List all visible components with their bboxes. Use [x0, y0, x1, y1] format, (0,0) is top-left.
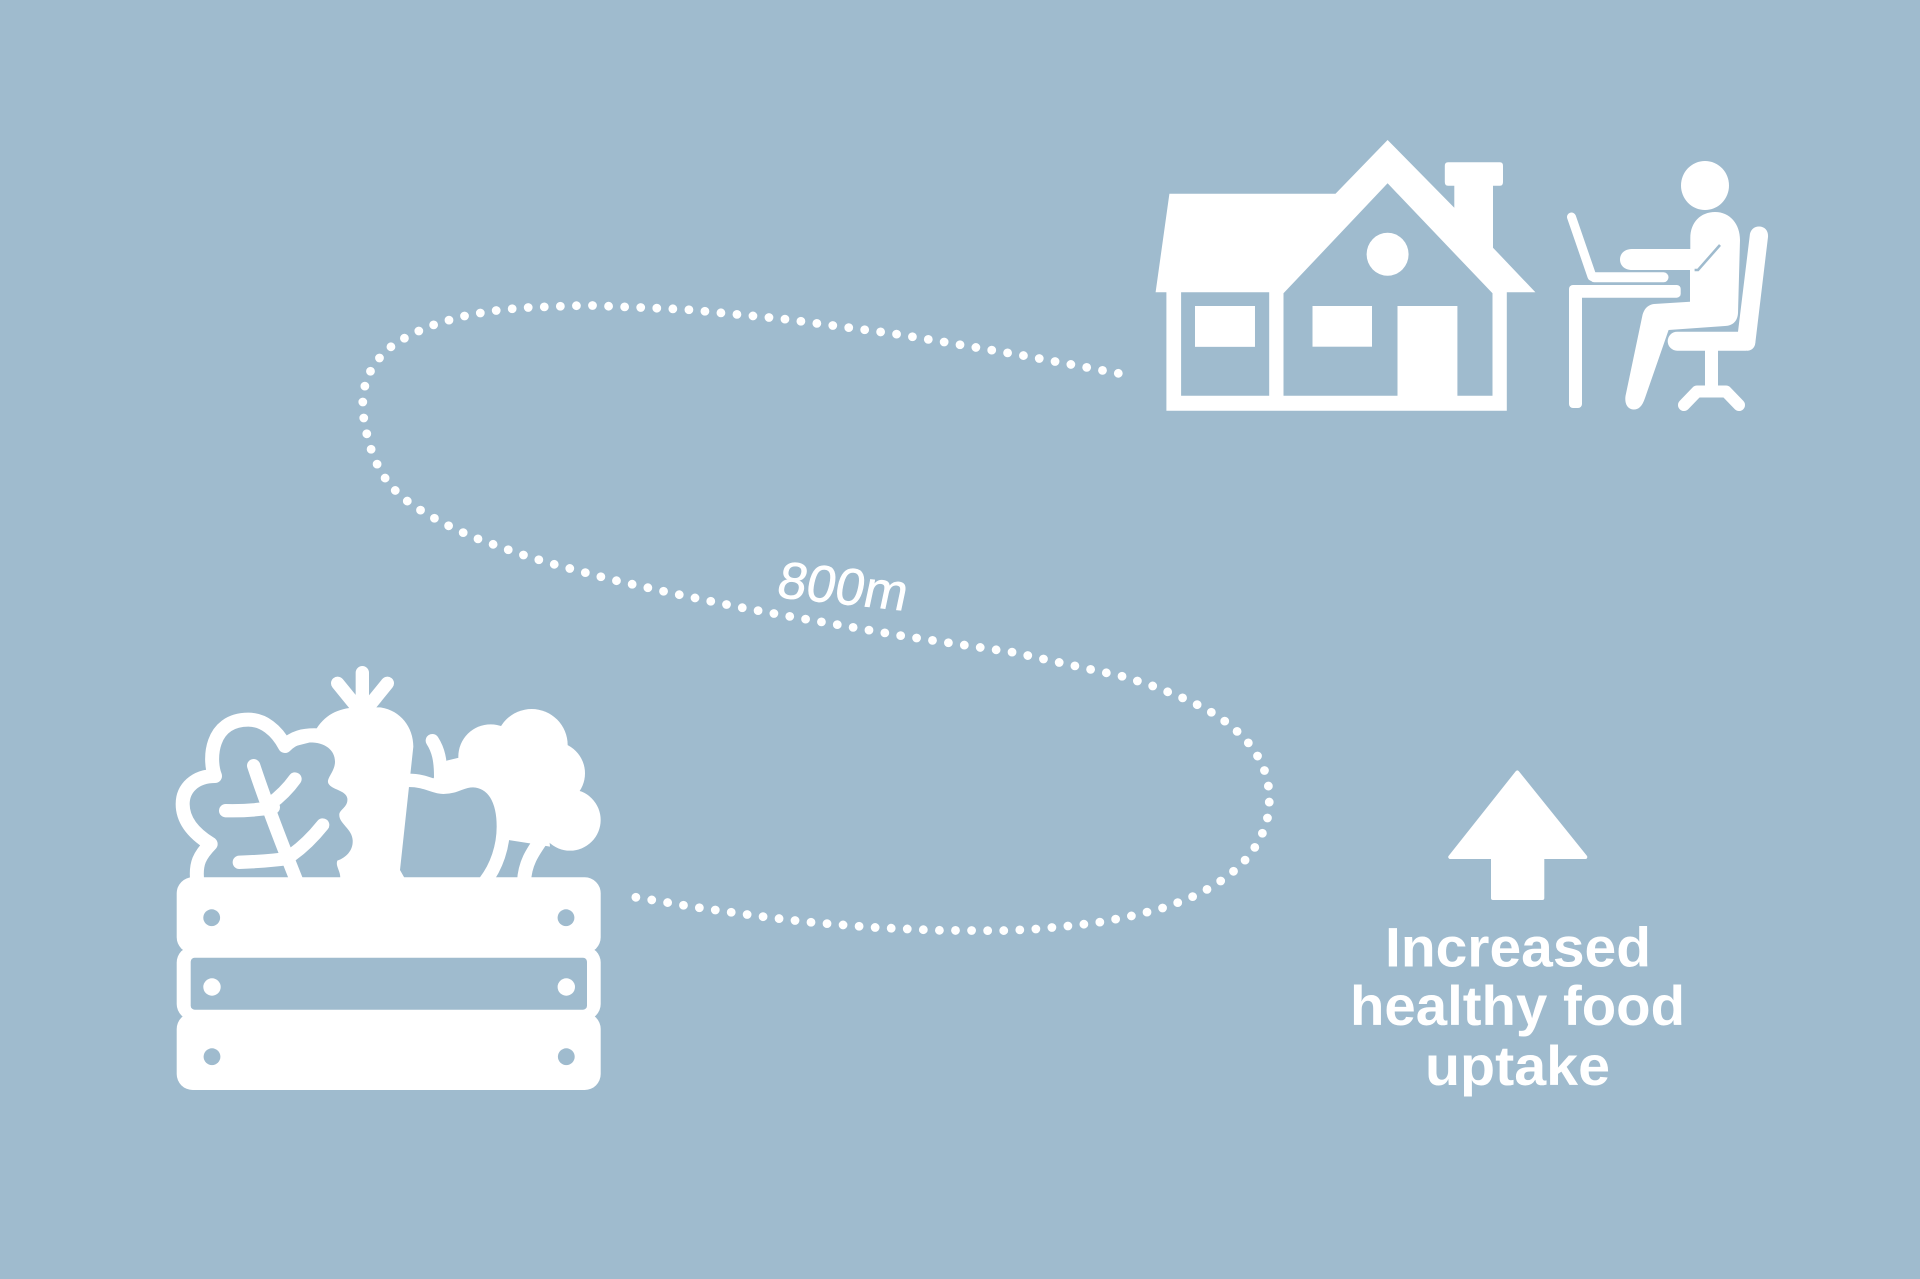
crate middle plank: [177, 946, 601, 1020]
person body and leg: [1620, 212, 1740, 410]
lettuce veins: [226, 766, 323, 882]
crate top plank: [177, 877, 601, 953]
person head: [1681, 161, 1729, 210]
house: round attic window: [1367, 233, 1409, 276]
person arm crease: [1695, 245, 1720, 270]
caption line 2: healthy food: [1350, 974, 1685, 1037]
desk leg: [1569, 287, 1582, 408]
crate screw holes top: [203, 909, 574, 926]
carrot body: [293, 707, 413, 880]
distance label: 800m: 800m: [772, 552, 914, 622]
icon: person working at laptop: [1569, 161, 1768, 410]
dotted route between house and food crate: [363, 305, 1269, 931]
chair seat: [1668, 332, 1755, 351]
crate screws middle: [203, 978, 575, 996]
chair post: [1705, 348, 1718, 390]
outcome caption: [1350, 916, 1685, 1097]
crate bottom plank: [177, 1013, 601, 1090]
house: left window: [1195, 306, 1255, 347]
carrot leaves: [338, 673, 387, 707]
house: right window: [1312, 306, 1372, 347]
icon: wooden crate: [177, 877, 601, 1090]
lettuce outline: [183, 720, 333, 882]
icon: house: [1156, 140, 1535, 411]
desk top: [1569, 285, 1681, 298]
beet stem and outline: [408, 741, 503, 882]
tree crown: [433, 709, 601, 851]
tree trunk: [524, 837, 543, 882]
icon: vegetables above crate: [183, 673, 601, 882]
crate middle opening: [191, 958, 587, 1010]
laptop base: [1590, 272, 1668, 282]
caption line 3: uptake: [1425, 1034, 1610, 1097]
chair base: [1684, 392, 1739, 405]
caption line 1: Increased: [1385, 916, 1651, 979]
chair back: [1738, 226, 1768, 351]
laptop screen: [1572, 217, 1592, 276]
icon: upward arrow: [1450, 772, 1585, 898]
crate screw holes bottom: [204, 1048, 575, 1065]
